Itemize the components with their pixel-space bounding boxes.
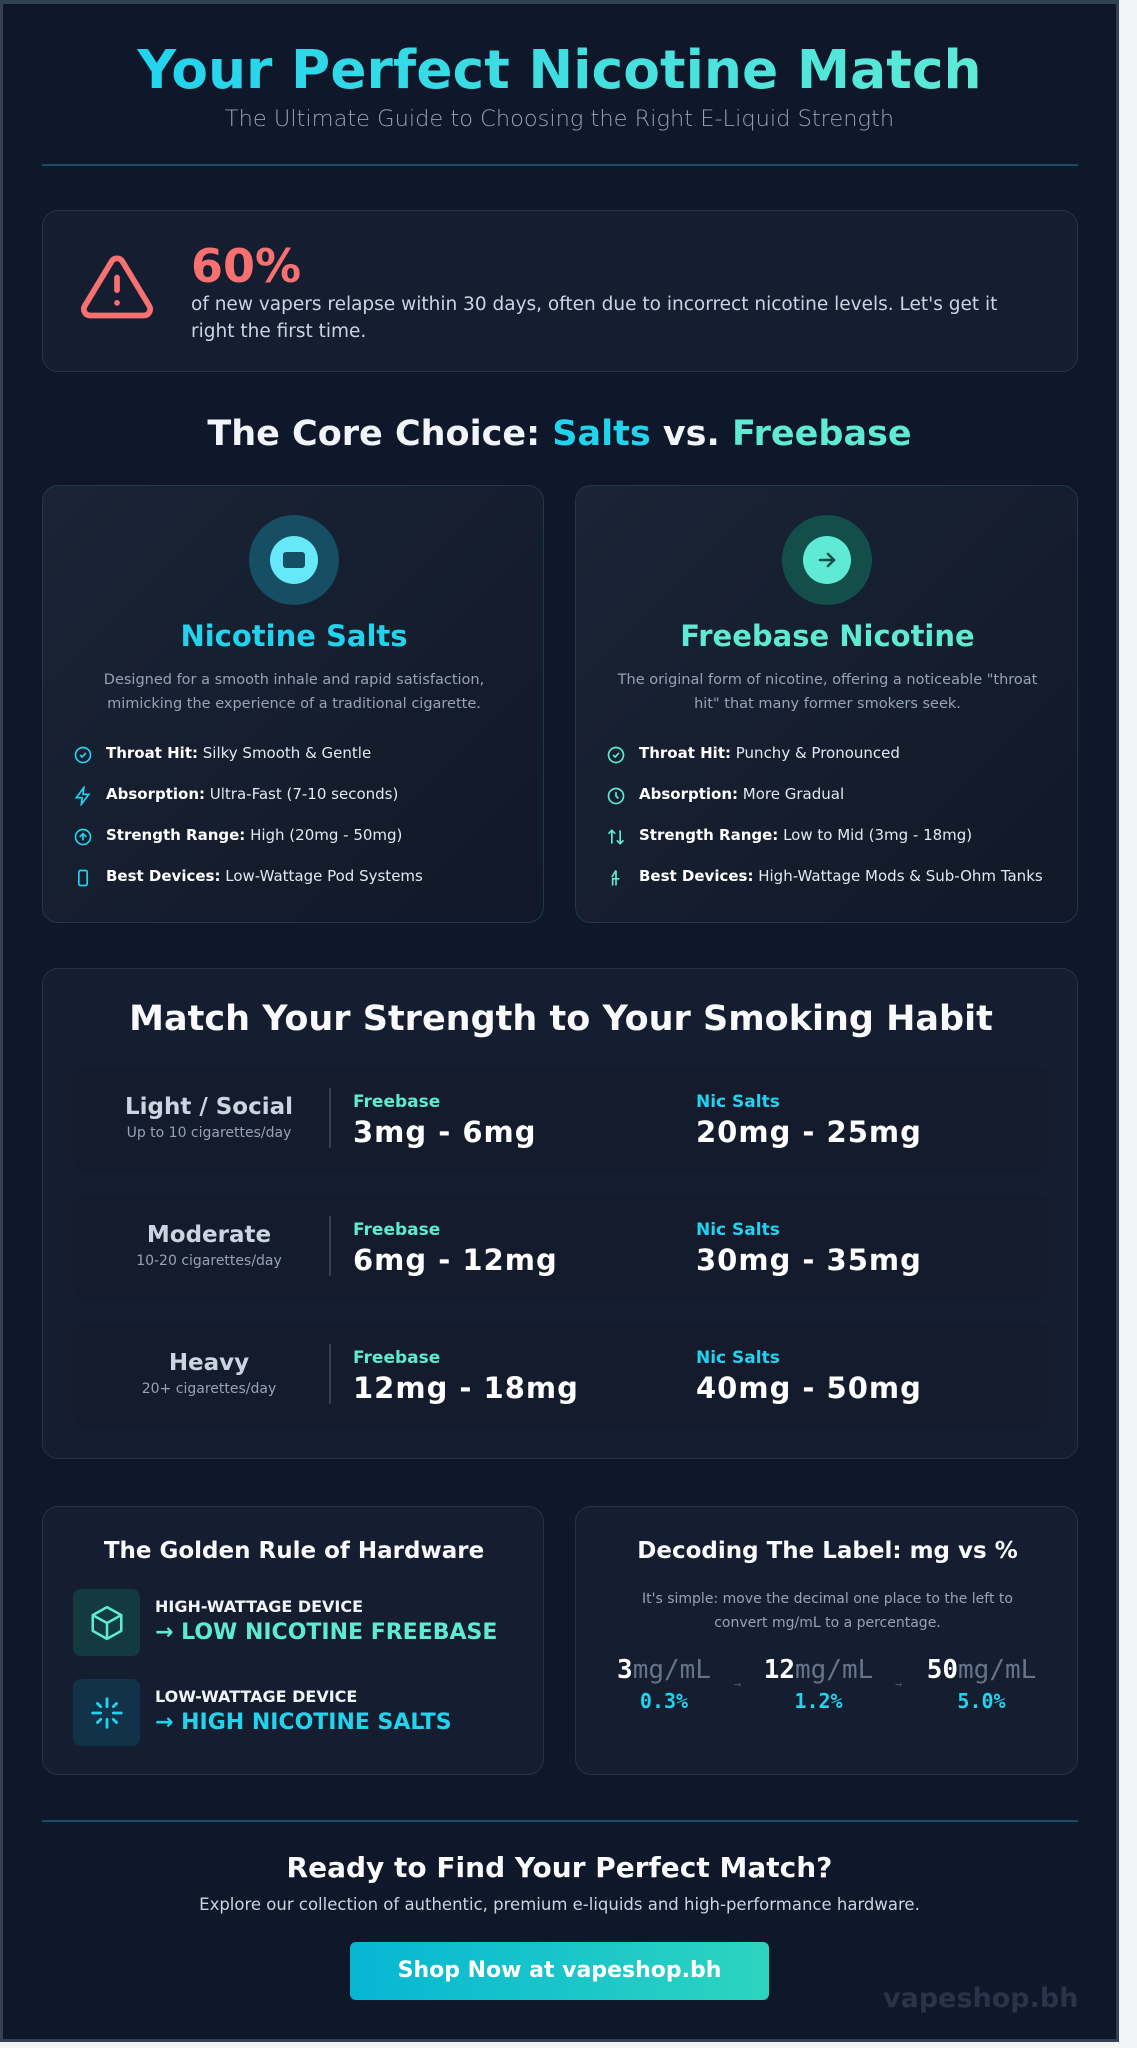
row: moderate: Nic Salts: [696, 1220, 780, 1240]
row: heavy: 12mg - 18mg: [353, 1371, 579, 1405]
rule: high wattage: → LOW NICOTINE FREEBASE: [155, 1620, 497, 1645]
conversion examples: →: [895, 1677, 902, 1691]
rule: high wattage: [73, 1589, 497, 1656]
row: light: 20mg - 25mg: [696, 1115, 922, 1149]
panel: decoding the label: [575, 1506, 1078, 1775]
heading: core choice: The Core Choice: Salts vs. Freebase: [207, 414, 912, 454]
panel: freebase nicotine: [575, 485, 1078, 923]
row: moderate: Moderate: [147, 1222, 271, 1248]
row: heavy: Freebase: [353, 1348, 440, 1368]
panel: strength matching: [42, 968, 1078, 1459]
row: light: Freebase: [353, 1092, 440, 1112]
feature list: Absorption: More Gradual: [639, 785, 844, 803]
icon: warning triangle: [80, 256, 154, 318]
card description: The original form of nicotine, offering a noticeable "throat hit" that many former smokers seek.: [618, 672, 1037, 712]
row: heavy: 20+ cigarettes/day: [142, 1381, 276, 1397]
row: heavy: Nic Salts: [696, 1348, 780, 1368]
card description: Designed for a smooth inhale and rapid satisfaction, mimicking the experience of a traditional cigarette.: [104, 672, 484, 712]
row: heavy: 40mg - 50mg: [696, 1371, 922, 1405]
row: light: 3mg - 6mg: [353, 1115, 537, 1149]
cta button: [350, 1942, 769, 2000]
rule: low wattage: → HIGH NICOTINE SALTS: [155, 1710, 452, 1735]
row: moderate: Freebase: [353, 1220, 440, 1240]
feature list: Best Devices: Low-Wattage Pod Systems: [106, 867, 423, 885]
subtitle: The Ultimate Guide to Choosing the Right E-Liquid Strength: [225, 106, 894, 132]
feature list: Best Devices: High-Wattage Mods & Sub-Ohm Tanks: [639, 867, 1043, 885]
row: moderate: [73, 1194, 1048, 1300]
panel: golden rule of hardware: [42, 1506, 544, 1775]
stat number: 60%: [191, 239, 301, 293]
heading: Match Your Strength to Your Smoking Habit: [129, 999, 993, 1039]
panel title: The Golden Rule of Hardware: [104, 1538, 484, 1564]
conversion examples: 50mg/mL: [927, 1655, 1036, 1685]
row: light: Light / Social: [125, 1094, 293, 1120]
cta text: Explore our collection of authentic, premium e-liquids and high-performance hardware.: [199, 1895, 920, 1914]
feature list: [608, 744, 1043, 886]
row: heavy: [73, 1322, 1048, 1428]
row: moderate: 30mg - 35mg: [696, 1243, 922, 1277]
conversion examples: 12mg/mL: [764, 1655, 873, 1685]
rule: high wattage: HIGH-WATTAGE DEVICE: [155, 1597, 363, 1616]
watermark: vapeshop.bh: [883, 1983, 1078, 2014]
panel: alert stat: [42, 210, 1078, 372]
rule: low wattage: LOW-WATTAGE DEVICE: [155, 1687, 357, 1706]
row: light: Up to 10 cigarettes/day: [127, 1125, 291, 1141]
rule: low wattage: [73, 1679, 452, 1746]
conversion examples: 0.3%: [640, 1689, 688, 1713]
explanation: It's simple: move the decimal one place to the left to convert mg/mL to a percentage.: [642, 1591, 1013, 1631]
feature list: Strength Range: Low to Mid (3mg - 18mg): [639, 826, 972, 844]
conversion examples: 5.0%: [957, 1689, 1006, 1713]
cta button: Shop Now at vapeshop.bh: [398, 1958, 721, 1983]
feature list: Absorption: Ultra-Fast (7-10 seconds): [106, 785, 398, 803]
feature list: Strength Range: High (20mg - 50mg): [106, 826, 402, 844]
feature list: Throat Hit: Punchy & Pronounced: [639, 744, 900, 762]
row: light: Nic Salts: [696, 1092, 780, 1112]
icon: freebase: [782, 515, 872, 605]
row: moderate: 6mg - 12mg: [353, 1243, 558, 1277]
feature list: [74, 744, 423, 886]
row: moderate: 10-20 cigarettes/day: [136, 1253, 282, 1269]
title: Your Perfect Nicotine Match: [137, 38, 982, 101]
row: heavy: Heavy: [169, 1350, 249, 1376]
panel: nicotine salts: [42, 485, 544, 923]
card title: Nicotine Salts: [180, 619, 408, 653]
panel title: Decoding The Label: mg vs %: [637, 1538, 1018, 1564]
conversion examples: →: [734, 1677, 741, 1691]
conversion examples: 1.2%: [794, 1689, 843, 1713]
stat text: of new vapers relapse within 30 days, often due to incorrect nicotine levels. Let's get it right the first time.: [191, 294, 997, 342]
card title: Freebase Nicotine: [680, 619, 975, 653]
icon: salts: [249, 515, 339, 605]
conversion examples: [617, 1655, 1036, 1713]
conversion examples: 3mg/mL: [617, 1655, 711, 1685]
row: light: [73, 1066, 1048, 1172]
feature list: Throat Hit: Silky Smooth & Gentle: [106, 744, 371, 762]
cta heading: Ready to Find Your Perfect Match?: [287, 1851, 832, 1884]
